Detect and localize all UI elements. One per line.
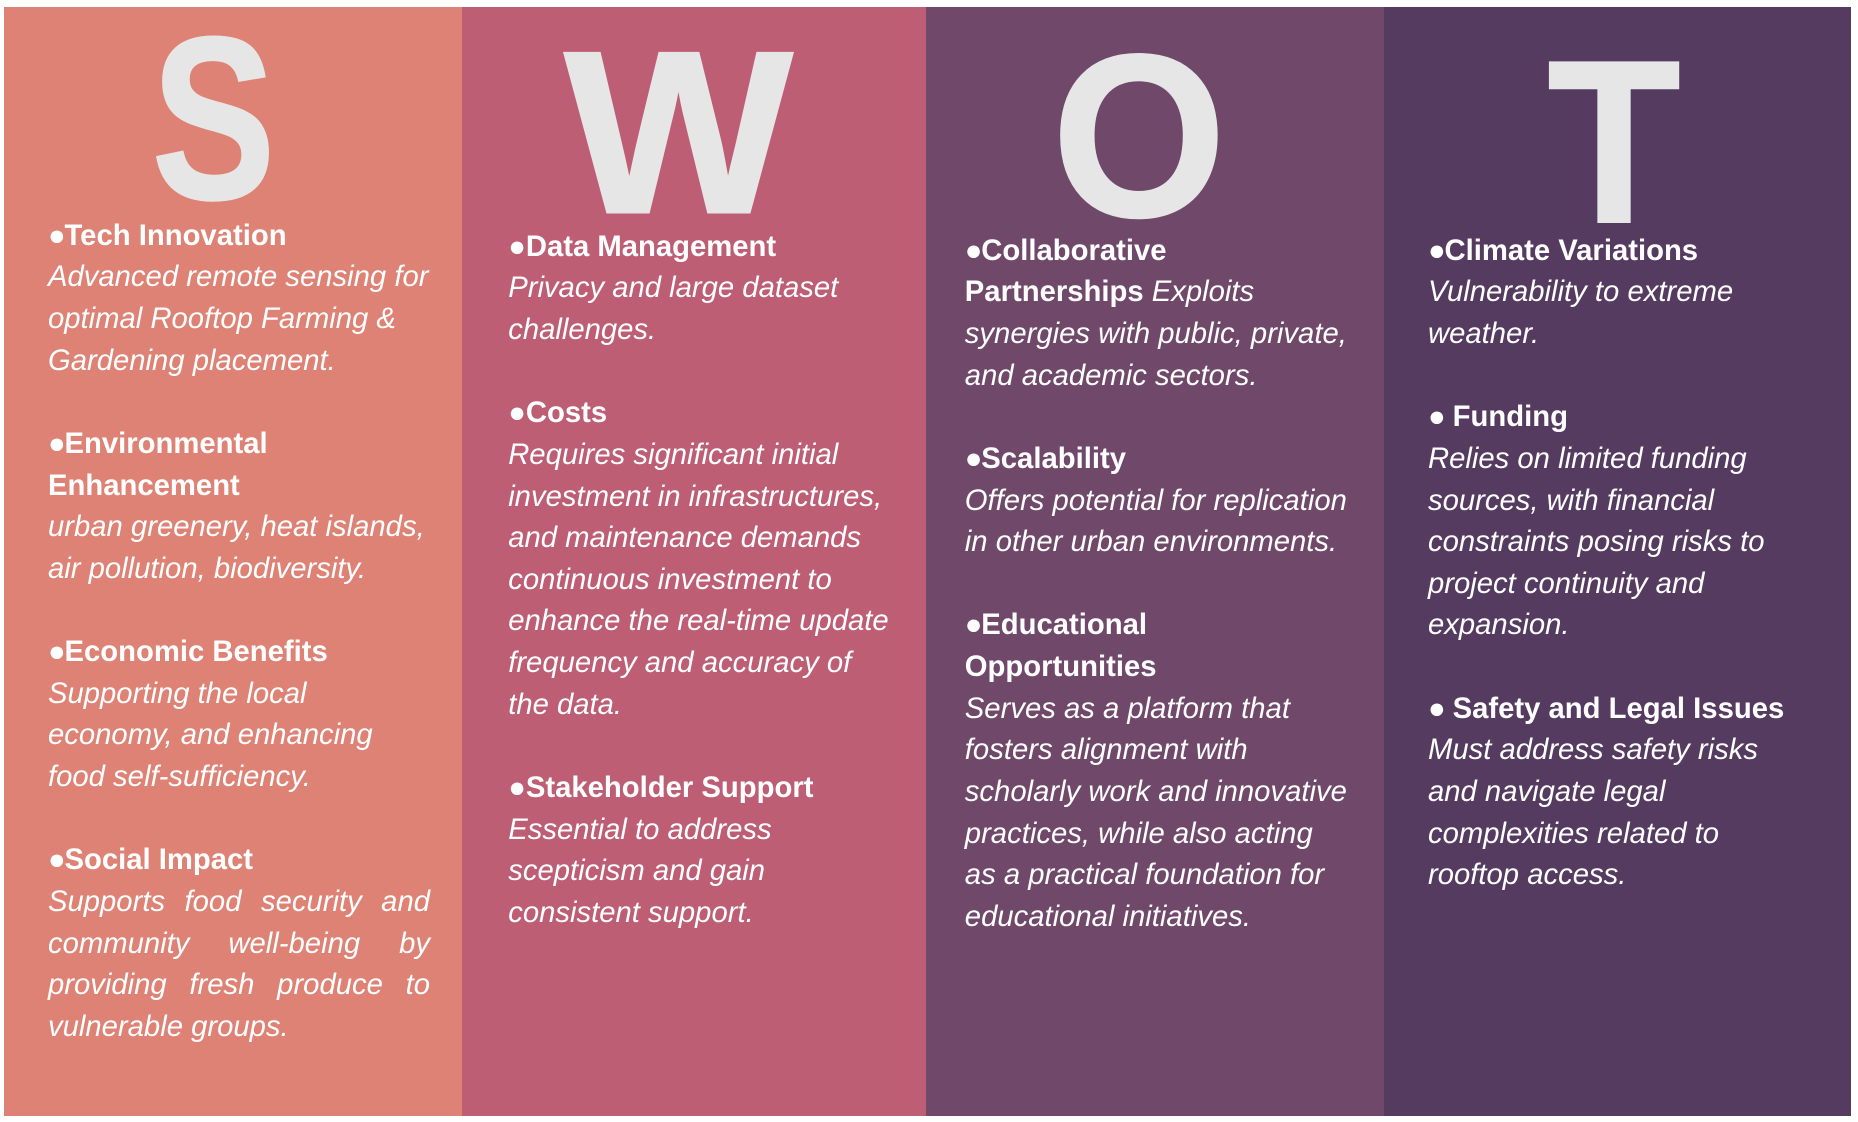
strength: tech innovation: Gardening placement.: [48, 345, 336, 377]
threats text: [1427, 235, 1784, 891]
strength: tech innovation: Advanced remote sensing for: [48, 261, 428, 293]
strength: economic benefits: food self-sufficiency.: [48, 761, 311, 793]
opportunity: scalability: in other urban environments.: [965, 526, 1337, 558]
strength: environmental enhancement: [48, 428, 425, 585]
weakness: costs: ●Costs: [508, 397, 607, 429]
threat: climate variations: ●Climate Variations: [1428, 235, 1698, 267]
strength: environmental enhancement: ●Environmental: [48, 428, 268, 460]
letter T: T: [1547, 12, 1681, 271]
threat: climate variations: [1428, 235, 1733, 350]
opportunity: educational opportunities: scholarly work and innovative: [965, 776, 1347, 808]
strength: environmental enhancement: urban greenery, heat islands,: [48, 511, 425, 543]
weakness: data management: Privacy and large dataset: [508, 272, 838, 304]
strength: economic benefits: ●Economic Benefits: [48, 636, 328, 668]
strength: environmental enhancement: Enhancement: [48, 470, 240, 502]
strength: social impact: Supports food security and: [48, 886, 430, 918]
strength: social impact: community well-being by: [48, 928, 430, 960]
opportunity: collaborative partnerships: synergies with public, private,: [965, 318, 1347, 350]
weakness: data management: ●Data Management: [508, 231, 776, 263]
strength: social impact: providing fresh produce to: [48, 969, 430, 1001]
opportunity: collaborative partnerships: [964, 235, 1347, 392]
panel: threats: [1384, 7, 1851, 1116]
weakness: stakeholder support: [508, 772, 814, 929]
opportunity: scalability: ●Scalability: [965, 443, 1126, 475]
weakness: stakeholder support: Essential to address: [508, 814, 772, 846]
opportunity: educational opportunities: Serves as a platform that: [965, 693, 1290, 725]
weaknesses text: [508, 231, 889, 929]
threat: funding: project continuity and: [1428, 568, 1704, 600]
opportunity: collaborative partnerships: Partnerships Exploits: [965, 276, 1254, 308]
threat: funding: Relies on limited funding: [1428, 443, 1747, 475]
weakness: costs: frequency and accuracy of: [508, 647, 851, 679]
strengths text: [46, 220, 432, 1043]
threat: safety and legal issues: ● Safety and Legal Issues: [1428, 693, 1784, 725]
threat: funding: ● Funding: [1428, 401, 1568, 433]
threat: funding: sources, with financial: [1428, 485, 1714, 517]
opportunity: scalability: [965, 443, 1347, 558]
weakness: costs: Requires significant initial: [508, 439, 838, 471]
threat: safety and legal issues: complexities related to: [1428, 818, 1719, 850]
opportunity: educational opportunities: educational initiatives.: [965, 901, 1251, 933]
threat: safety and legal issues: rooftop access.: [1428, 859, 1626, 891]
threat: safety and legal issues: [1428, 693, 1784, 891]
strength: social impact: [47, 844, 432, 1043]
strength: social impact: ●Social Impact vulnerable groups.: [48, 844, 289, 1043]
panel: strengths: [4, 7, 462, 1116]
opportunity: educational opportunities: practices, while also acting: [965, 818, 1313, 850]
opportunity: educational opportunities: fosters alignment with: [965, 734, 1248, 766]
weakness: stakeholder support: consistent support.: [508, 897, 754, 929]
strength: environmental enhancement: air pollution, biodiversity.: [48, 553, 366, 585]
threat: safety and legal issues: and navigate legal: [1428, 776, 1665, 808]
threat: safety and legal issues: Must address safety risks: [1428, 734, 1758, 766]
weakness: data management: [508, 231, 840, 346]
weakness: costs: and maintenance demands: [508, 522, 861, 554]
threat: funding: constraints posing risks to: [1428, 526, 1765, 558]
opportunity: scalability: Offers potential for replication: [965, 485, 1347, 517]
weakness: data management: challenges.: [508, 314, 656, 346]
weakness: costs: the data.: [508, 689, 622, 721]
threat: climate variations: weather.: [1428, 318, 1539, 350]
threat: funding: expansion.: [1428, 609, 1569, 641]
threat: climate variations: Vulnerability to extreme: [1428, 276, 1733, 308]
weakness: costs: [508, 397, 889, 721]
opportunity: collaborative partnerships: ●Collaborative: [965, 235, 1167, 267]
opportunity: collaborative partnerships: and academic sectors.: [965, 360, 1257, 392]
strength: tech innovation: optimal Rooftop Farming &: [48, 303, 396, 335]
letter O: O: [1052, 7, 1226, 266]
letter W: W: [564, 7, 793, 262]
weakness: costs: enhance the real-time update: [508, 605, 889, 637]
strength: economic benefits: economy, and enhancing: [48, 719, 373, 751]
opportunity: educational opportunities: ●Educational: [965, 609, 1147, 641]
opportunity: educational opportunities: [964, 609, 1347, 933]
opportunities text: [964, 235, 1347, 933]
weakness: stakeholder support: ●Stakeholder Support: [508, 772, 814, 804]
threat: funding: [1427, 401, 1765, 641]
opportunity: educational opportunities: as a practical foundation for: [965, 859, 1324, 891]
weakness: costs: continuous investment to: [508, 564, 832, 596]
weakness: stakeholder support: scepticism and gain: [508, 855, 765, 887]
panel: weaknesses: [462, 7, 926, 1116]
opportunity: educational opportunities: Opportunities: [965, 651, 1157, 683]
weakness: costs: investment in infrastructures,: [508, 481, 882, 513]
strength: economic benefits: [48, 636, 373, 793]
strength: tech innovation: ●Tech Innovation: [48, 220, 287, 252]
strength: tech innovation: [46, 220, 430, 377]
strength: economic benefits: Supporting the local: [48, 678, 307, 710]
panel: opportunities: [926, 7, 1384, 1116]
